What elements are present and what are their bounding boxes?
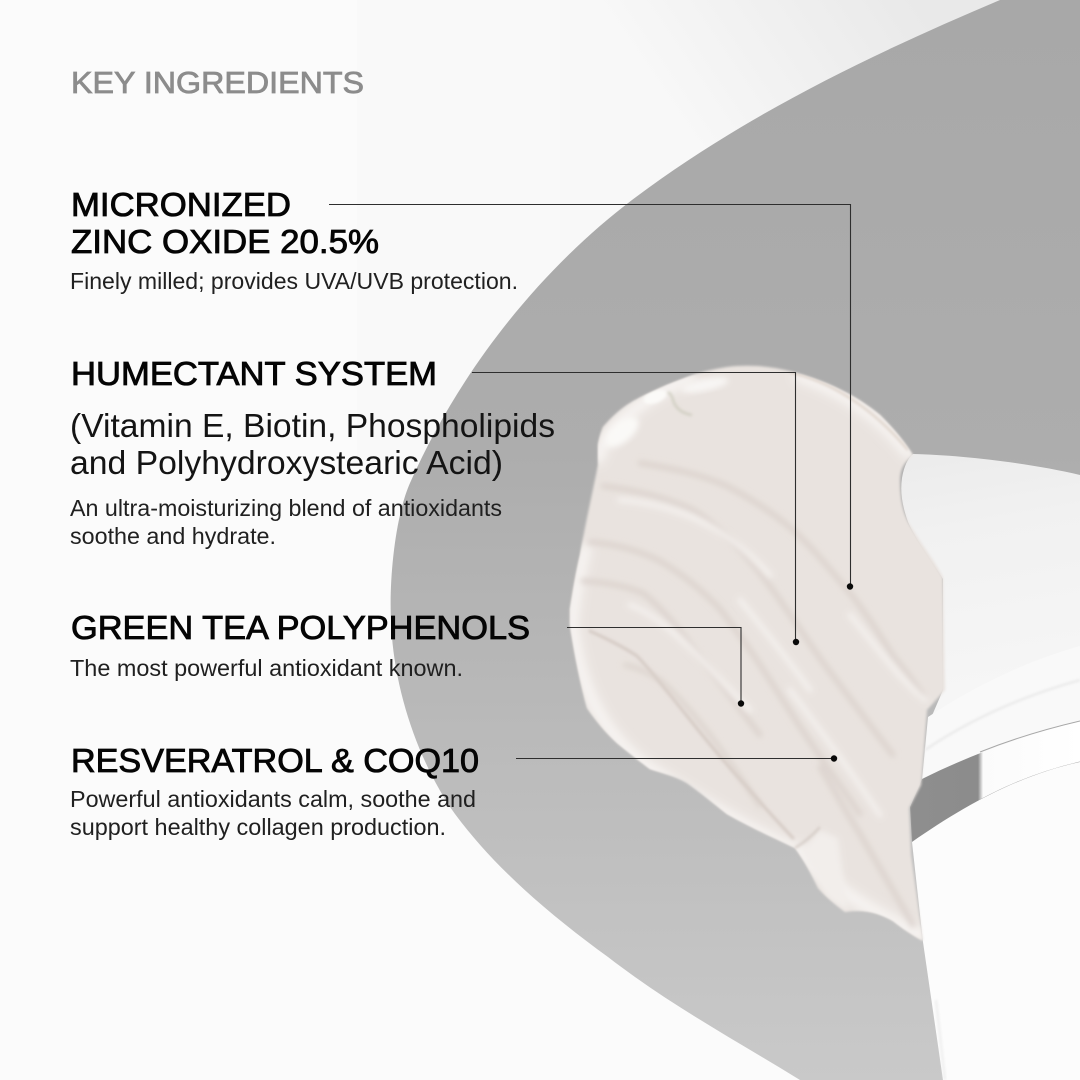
chrome band — [910, 721, 1080, 842]
cream outer glow — [572, 376, 920, 935]
ingredient: humectant system: soothe and hydrate. — [70, 523, 276, 549]
leader line: humectant system — [472, 372, 799, 645]
ingredient: micronized zinc oxide: ZINC OXIDE 20.5% — [71, 223, 379, 260]
ingredient: micronized zinc oxide: MICRONIZED — [71, 186, 291, 223]
ingredient: micronized zinc oxide — [70, 186, 518, 294]
leader line: resveratrol and coq10 — [516, 755, 837, 762]
ingredient: humectant system: and Polyhydroxystearic Acid) — [70, 445, 503, 482]
title: KEY INGREDIENTS — [71, 65, 364, 100]
ingredient: resveratrol and coq10: support healthy collagen production. — [70, 814, 446, 840]
cream fold near the tip — [794, 827, 840, 900]
ingredient: green tea polyphenols: GREEN TEA POLYPHENOLS — [71, 609, 530, 646]
grey circular backdrop — [391, 0, 1080, 1080]
ingredient: resveratrol and coq10 — [70, 742, 479, 840]
tube neck — [901, 454, 1080, 725]
cream swatch — [570, 366, 945, 941]
cream lump — [609, 376, 727, 447]
ingredient: humectant system: (Vitamin E, Biotin, Phospholipids — [70, 408, 555, 445]
ingredient: green tea polyphenols: The most powerful antioxidant known. — [70, 655, 463, 681]
ingredient: humectant system: An ultra-moisturizing blend of antioxidants — [70, 495, 502, 521]
cream highlights — [620, 500, 925, 815]
ingredient: green tea polyphenols — [70, 609, 530, 681]
icon: tube of sunscreen — [901, 454, 1080, 1080]
ingredient: resveratrol and coq10: RESVERATROL & COQ10 — [71, 742, 479, 779]
tube body — [912, 762, 1080, 1080]
ingredient: humectant system — [70, 355, 555, 549]
ingredient: resveratrol and coq10: Powerful antioxidants calm, soothe and — [70, 786, 476, 812]
leader line: green tea polyphenols — [567, 628, 744, 707]
ingredient: humectant system: HUMECTANT SYSTEM — [71, 355, 437, 392]
leader line: zinc oxide — [329, 204, 853, 590]
ingredient: micronized zinc oxide: Finely milled; provides UVA/UVB protection. — [70, 268, 518, 294]
cream ridges: shadows — [583, 463, 923, 925]
collar — [922, 646, 1080, 780]
